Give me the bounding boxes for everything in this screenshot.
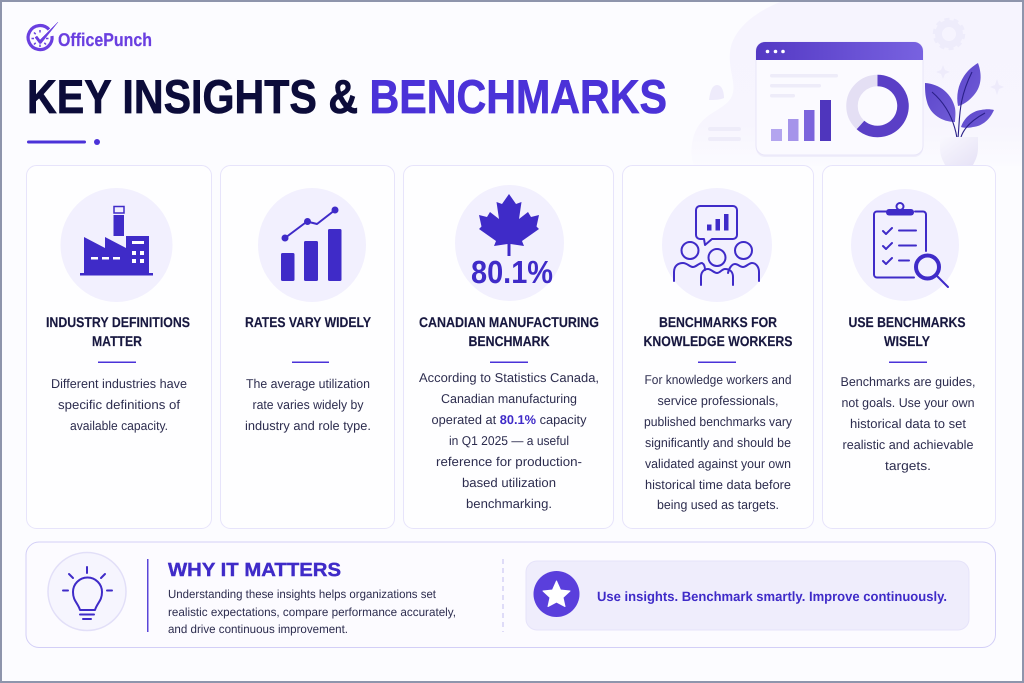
body text: validated against your own: [645, 456, 791, 471]
body text: in Q1 2025 — a useful: [449, 433, 569, 448]
header illustration: [691, 2, 1022, 166]
heading: [46, 314, 190, 349]
body text: [644, 372, 793, 512]
panel: knowledge workers: [622, 166, 814, 528]
panel: use benchmarks wisely: [822, 166, 996, 528]
heading: CANADIAN MANUFACTURING: [419, 314, 599, 330]
body text: According to Statistics Canada,: [419, 370, 599, 385]
body text: [168, 587, 456, 636]
body text: reference for production-: [436, 454, 582, 469]
heading: MATTER: [92, 333, 142, 349]
heading: INDUSTRY DEFINITIONS: [46, 314, 190, 330]
logo: [28, 22, 152, 50]
body text: historical time data before: [645, 477, 791, 492]
body text: [245, 376, 371, 433]
icon: team with chart bubble: [674, 206, 759, 285]
icon: bar and line chart: [281, 206, 342, 281]
body text: Benchmarks are guides,: [840, 374, 976, 389]
icon: star: [534, 571, 580, 617]
body text: and drive continuous improvement.: [168, 622, 348, 636]
body text: realistic and achievable: [842, 437, 974, 452]
body text: Understanding these insights helps organizations set: [168, 587, 437, 601]
heading: [644, 314, 792, 349]
body text: significantly and should be: [645, 435, 791, 450]
body text: Canadian manufacturing: [441, 391, 577, 406]
heading: why it matters: WHY IT MATTERS: [168, 560, 341, 581]
heading: BENCHMARKS FOR: [659, 314, 777, 330]
body text: rate varies widely by: [252, 397, 364, 412]
title: KEY INSIGHTS & BENCHMARKS: [27, 71, 667, 124]
panel: industry definitions: [26, 166, 212, 528]
icon: factory: [80, 206, 153, 276]
body text: based utilization: [462, 475, 556, 490]
body text: benchmarking.: [466, 496, 552, 511]
body text: The average utilization: [246, 376, 370, 391]
icon: maple leaf: [479, 194, 539, 256]
body text: available capacity.: [70, 418, 168, 433]
body text: [840, 374, 976, 473]
heading: RATES VARY WIDELY: [245, 314, 372, 330]
icon: clock with check: [28, 22, 58, 50]
body text: realistic expectations, compare performance accurately,: [168, 605, 456, 619]
logo: OfficePunch: [58, 29, 152, 50]
body text: being used as targets.: [657, 497, 779, 512]
callout: [526, 561, 969, 630]
body text: Different industries have: [51, 376, 187, 391]
panel: canadian manufacturing: [404, 166, 614, 528]
heading: BENCHMARK: [468, 333, 550, 349]
panel: rates vary: [220, 166, 394, 528]
body text: targets.: [885, 458, 931, 473]
body text: industry and role type.: [245, 418, 371, 433]
body text: operated at 80.1% capacity: [432, 412, 587, 427]
icon: clipboard with magnifier: [874, 203, 948, 287]
icon: light bulb: [48, 552, 126, 630]
heading: [848, 314, 966, 349]
body text: [51, 376, 187, 433]
body text: historical data to set: [850, 416, 966, 431]
body text: service professionals,: [658, 393, 778, 408]
heading: [419, 314, 599, 349]
dashboard window: [756, 42, 923, 157]
body text: not goals. Use your own: [842, 395, 974, 410]
stat: 80.1%: 80.1%: [471, 254, 553, 290]
plant: [925, 63, 994, 165]
heading: USE BENCHMARKS: [848, 314, 966, 330]
heading: KNOWLEDGE WORKERS: [644, 333, 792, 349]
body text: For knowledge workers and: [644, 372, 792, 387]
body text: [419, 370, 599, 511]
body text: specific definitions of: [58, 397, 180, 412]
body text: published benchmarks vary: [644, 414, 793, 429]
heading: WISELY: [884, 333, 931, 349]
panel: why it matters: [26, 542, 996, 648]
title underline: [27, 139, 100, 145]
callout: Use insights. Benchmark smartly. Improve continuously.: [597, 589, 947, 604]
